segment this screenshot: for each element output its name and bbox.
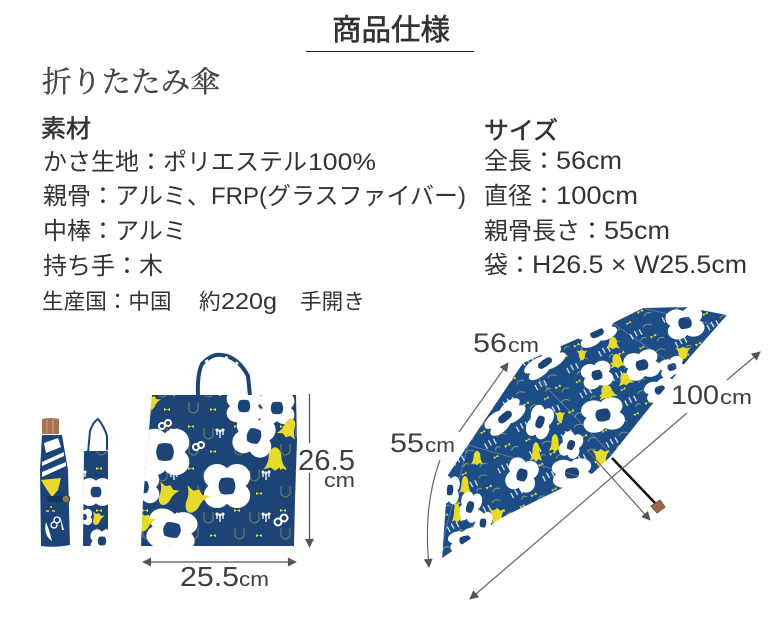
label: 55cm [390, 428, 455, 458]
label: bag height: 26.5 [298, 445, 355, 477]
icon: open umbrella [442, 307, 727, 558]
total length: 56cm [556, 147, 622, 175]
ribs: 親骨：アルミ、 [43, 183, 211, 210]
canopy fabric: かさ生地：ポリエステル [43, 149, 307, 176]
label: bag width: cm [239, 569, 269, 591]
label: 56cm [473, 328, 539, 358]
icon: folded umbrella in bag [83, 418, 108, 546]
label: 56cm: cm [508, 335, 539, 357]
rib length: 55cm [604, 217, 670, 245]
materials heading: 素材 [41, 115, 91, 143]
icon: umbrella bag [141, 352, 297, 546]
product name heading: 折りたたみ傘 [42, 66, 220, 99]
diameter: 100cm [556, 182, 638, 210]
label: 55cm: cm [425, 435, 455, 457]
origin, weight, opening: 生産国：中国 [42, 289, 172, 314]
panel: size [484, 117, 747, 279]
label: 100cm [671, 380, 752, 410]
rib length: 親骨長さ： [484, 218, 604, 245]
handle: 持ち手：木 [43, 253, 163, 280]
label: 55cm: 55 [390, 428, 424, 458]
arrow: total length [459, 363, 508, 432]
size heading: サイズ [484, 117, 558, 145]
arrow: ferrule to tip [587, 450, 650, 520]
label: bag height: cm [324, 470, 355, 492]
umbrella canopy [442, 307, 727, 558]
label: 100cm: 100 [671, 380, 719, 410]
arrow: rib length [427, 460, 440, 567]
icon: folded umbrella [40, 418, 70, 547]
bag size: H26.5 × W25.5cm [532, 251, 747, 279]
origin, weight, opening: 手開き [300, 289, 365, 314]
arrow: diameter lower [470, 413, 687, 599]
canopy fabric: 100% [308, 149, 376, 176]
bag handle [198, 355, 250, 396]
origin, weight, opening: 220g [221, 288, 277, 314]
label: 56cm: 56 [473, 328, 507, 358]
ribs: FRP(グラスファイバー) [211, 183, 466, 210]
diameter: 直径： [484, 183, 556, 210]
arrow: bag height [308, 394, 310, 547]
umbrella handle [651, 500, 665, 513]
title: 商品仕様 [332, 14, 450, 47]
origin, weight, opening: 約 [199, 289, 221, 314]
umbrella shaft [612, 458, 655, 503]
shaft: 中棒：アルミ [43, 218, 187, 245]
label: 100cm: cm [720, 387, 752, 409]
panel: materials [41, 115, 466, 314]
label: bag width [180, 561, 269, 592]
arrow: diameter upper [727, 352, 760, 380]
label: bag width: 25.5 [180, 561, 239, 592]
total length: 全長： [484, 148, 556, 175]
bag body [141, 395, 297, 546]
label: bag height [298, 445, 355, 492]
bag size: 袋： [484, 252, 532, 279]
arrow: bag width [143, 561, 296, 563]
